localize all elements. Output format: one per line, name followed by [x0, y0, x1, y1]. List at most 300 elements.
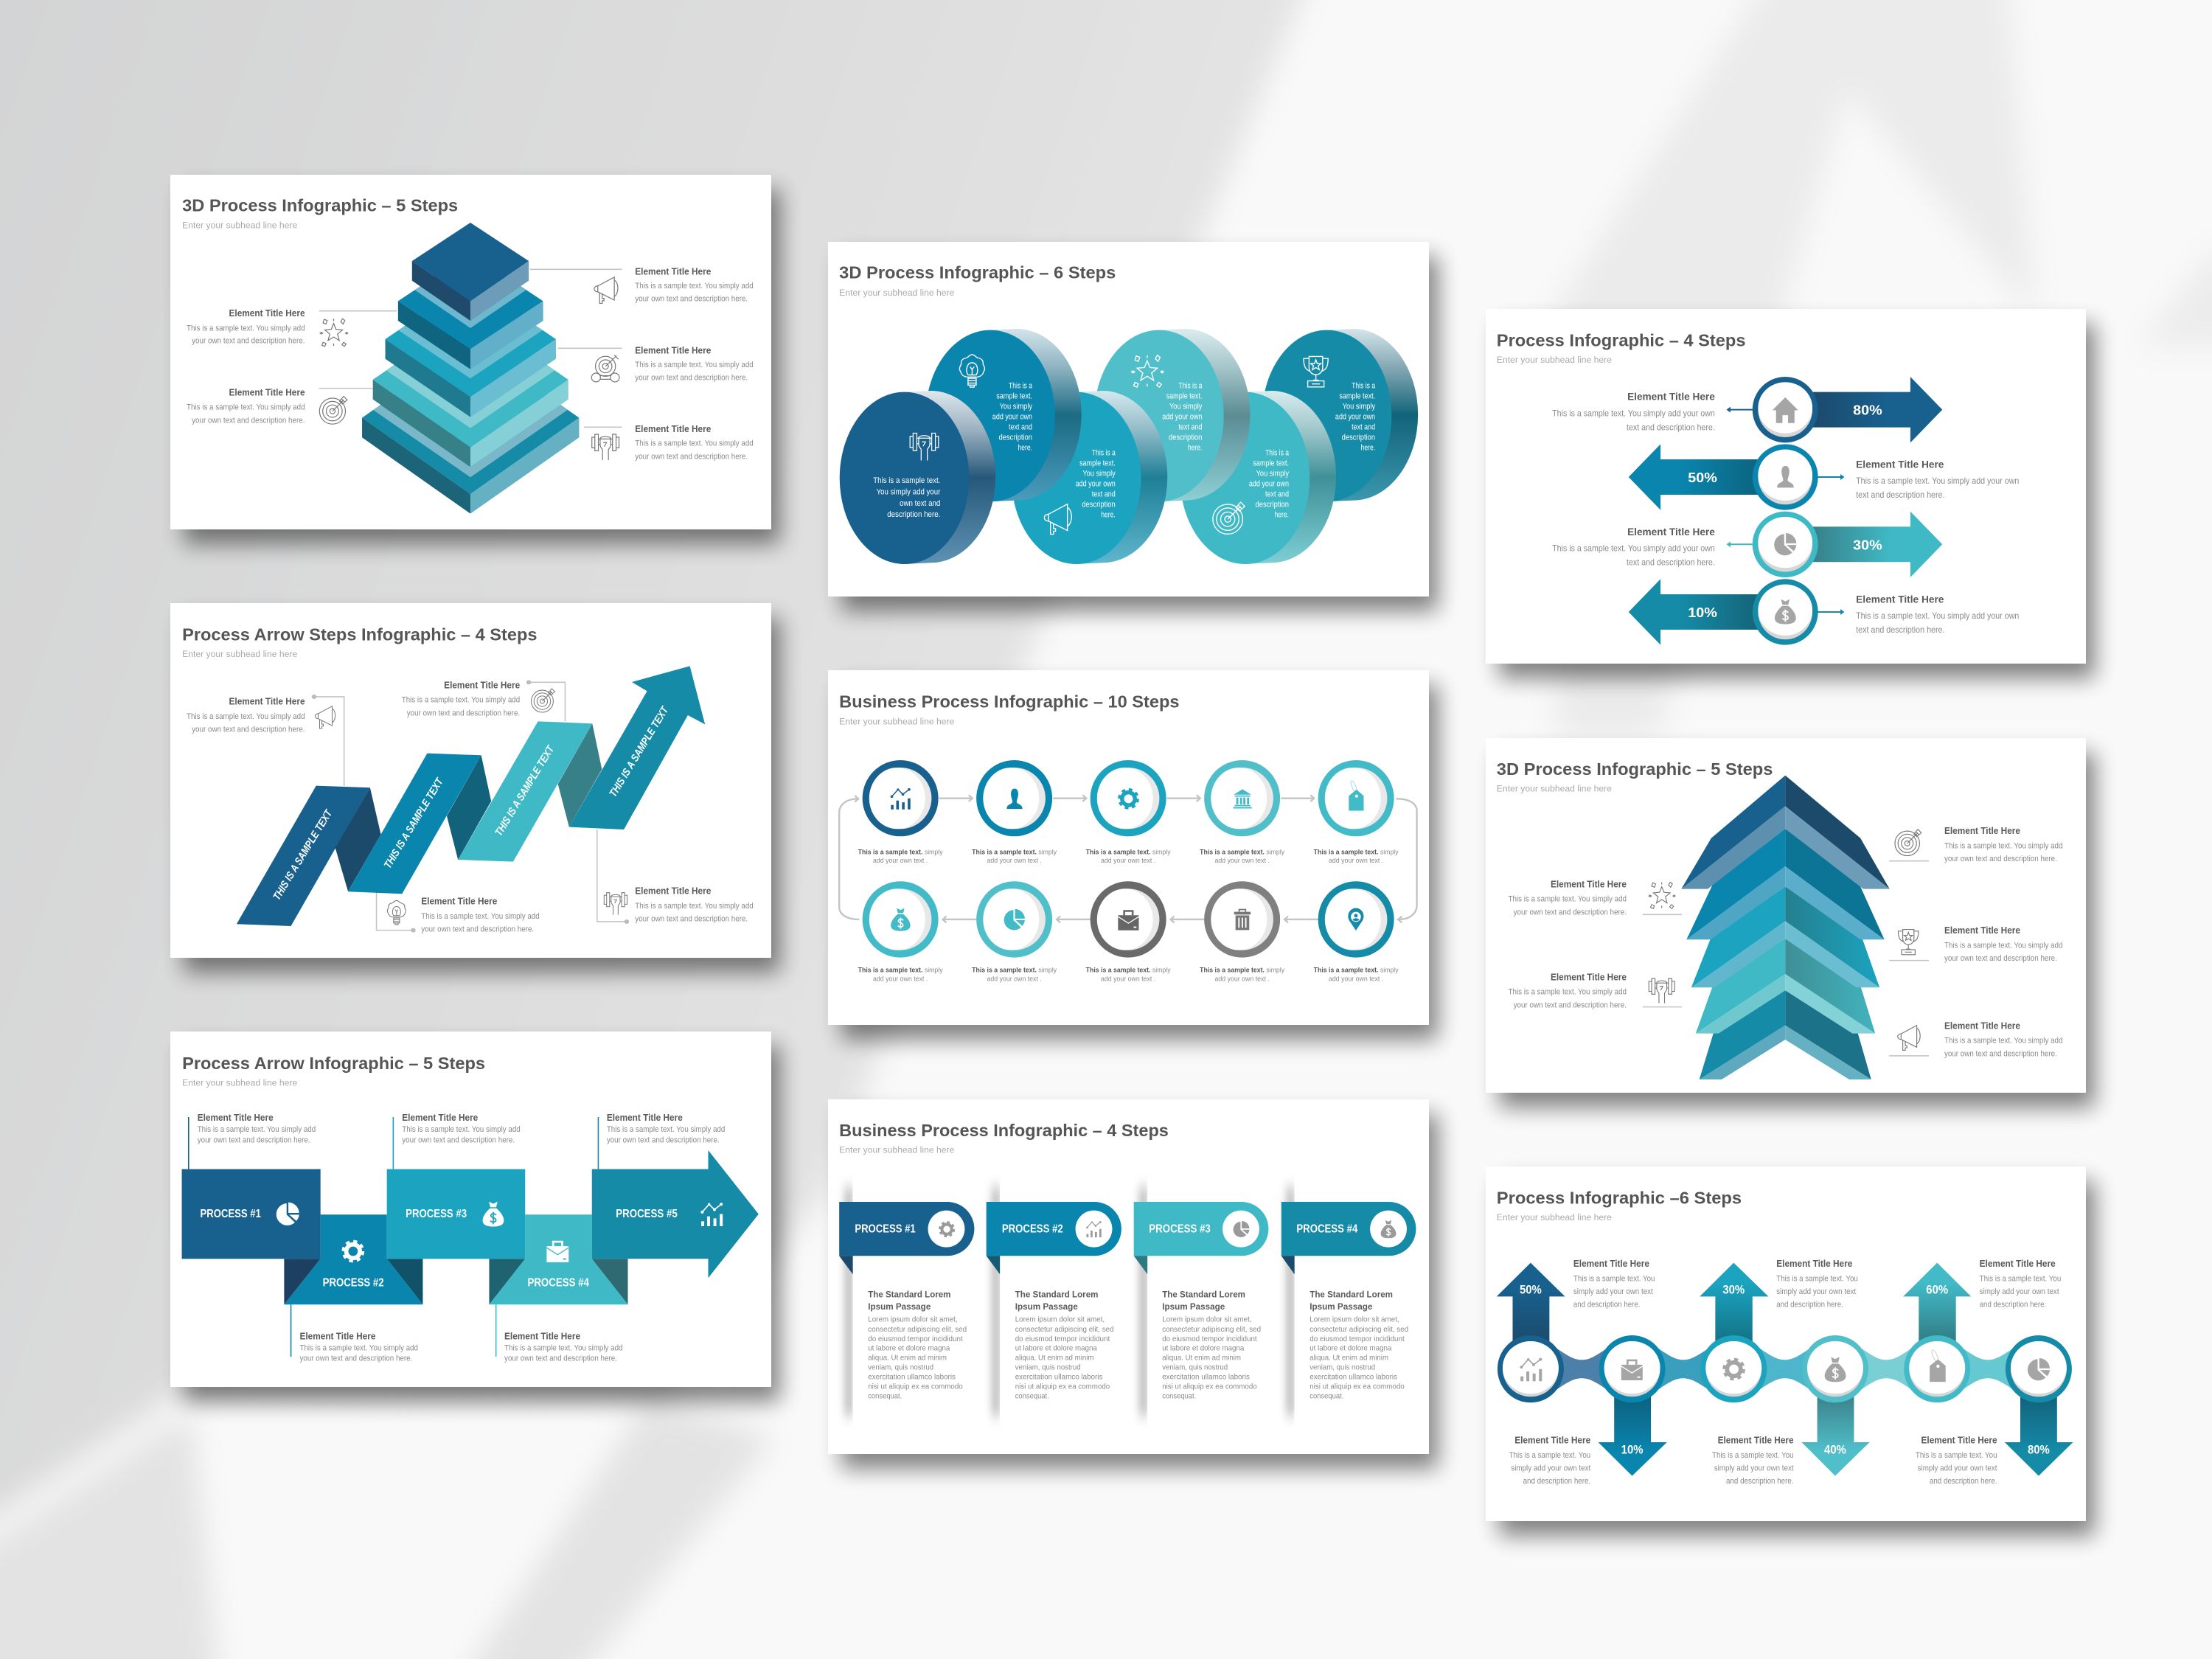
column 1: The Standard Lorem — [868, 1290, 950, 1299]
arrow down 40%: 40% — [1824, 1443, 1846, 1456]
panel: Process Infographic 6 steps — [1486, 1166, 2095, 1536]
callout 1: your own text and description here. — [198, 1135, 310, 1144]
column 2: nisi ut aliquip ex ea commodo — [1015, 1382, 1110, 1391]
callout: 80% — [1552, 392, 1715, 432]
callout top 1: This is a sample text. You — [1573, 1274, 1655, 1283]
callout 2: This is a sample text. You simply add — [299, 1343, 418, 1352]
callout lines — [189, 1117, 598, 1357]
column 2: PROCESS #2 — [1002, 1222, 1063, 1235]
callout right top — [1944, 826, 2062, 863]
column 1: nisi ut aliquip ex ea commodo — [868, 1382, 963, 1391]
callout left upper — [1509, 879, 1627, 917]
callout top 2: This is a sample text. You — [1776, 1274, 1858, 1283]
disc: front left — [840, 391, 995, 564]
arrow up 60%: 60% — [1926, 1283, 1948, 1296]
disc: front left: You simply add your — [877, 488, 940, 497]
column 4: veniam, quis nostrud — [1310, 1363, 1375, 1371]
callout lower left: Element Title Here — [229, 388, 305, 398]
callout 2: your own text and description here. — [299, 1354, 412, 1363]
column 2: do eiusmod tempor incididunt — [1015, 1335, 1110, 1343]
disc: front middle: here. — [1101, 510, 1116, 519]
callout right bottom: This is a sample text. You simply add — [1944, 1037, 2062, 1046]
icon: target — [319, 397, 347, 424]
column 1: Ipsum Passage — [868, 1302, 931, 1312]
step 8 — [1086, 881, 1171, 983]
column 2: consequat. — [1015, 1392, 1049, 1400]
callout: 30%: Element Title Here — [1627, 526, 1715, 538]
step 5: add your own text . — [1329, 857, 1383, 864]
callout: 80%: text and description here. — [1627, 423, 1715, 432]
process 3 block: PROCESS #3 — [406, 1208, 467, 1220]
callout top 2: Element Title Here — [1776, 1259, 1852, 1269]
column 4: aliqua. Ut enim ad minim — [1310, 1354, 1388, 1362]
connectors — [1554, 1347, 2015, 1391]
panel: 3D Process Infographic 5 steps pyramid — [170, 175, 780, 544]
callout 4: Element Title Here — [504, 1331, 580, 1341]
callout bottom 1: simply add your own text — [1511, 1464, 1590, 1473]
callout upper left: Element Title Here — [229, 308, 305, 319]
step 2: add your own text . — [987, 857, 1042, 864]
step 1: This is a sample text. simply — [858, 848, 943, 856]
step 4: This is a sample text. simply — [1200, 848, 1285, 856]
callout top 2: simply add your own text — [1776, 1287, 1856, 1296]
callout top 3: This is a sample text. You — [1980, 1274, 2061, 1283]
callout 3: This is a sample text. You simply add — [402, 1125, 521, 1134]
leader dots — [312, 680, 629, 933]
callout 3 — [402, 1113, 521, 1144]
callout left lower: Element Title Here — [1551, 972, 1627, 982]
column 2: consectetur adipiscing elit, sed — [1015, 1325, 1114, 1333]
callout 3: This is a sample text. You simply add — [421, 912, 540, 921]
disc: back middle: You simply — [1169, 403, 1203, 411]
step 1: 80% arrow — [1727, 377, 1942, 442]
column 3: consequat. — [1162, 1392, 1196, 1400]
callout bottom 3: and description here. — [1930, 1477, 1997, 1486]
callout 4 — [635, 886, 754, 924]
disc: back right — [1262, 329, 1418, 501]
step 7 — [1200, 881, 1285, 983]
disc: front left: own text and — [900, 499, 940, 508]
callout upper left: your own text and description here. — [192, 337, 305, 346]
icon: megaphone — [1898, 1026, 1920, 1050]
disc: back middle: This is a — [1178, 382, 1202, 391]
callout top 3: simply add your own text — [1980, 1287, 2059, 1296]
callout top 1: and description here. — [1573, 1300, 1640, 1309]
callout: 10%: text and description here. — [1856, 625, 1945, 635]
callout 5: This is a sample text. You simply add — [607, 1125, 725, 1134]
title: 3D Process Infographic – 5 Steps — [1497, 759, 1773, 779]
column 4: The Standard Lorem — [1310, 1290, 1393, 1299]
leader lines — [1643, 861, 1929, 1056]
disc: back middle: text and — [1178, 422, 1202, 431]
callout: 30% — [1552, 526, 1715, 567]
callout mid right — [635, 345, 754, 383]
subhead: Enter your subhead line here — [1497, 355, 1612, 365]
title: Business Process Infographic – 10 Steps — [839, 692, 1180, 712]
step 5 — [1314, 760, 1399, 864]
callout top 3 — [1980, 1259, 2061, 1309]
panel: 3D Process Infographic 5 steps chevrons — [1486, 738, 2095, 1107]
pyramid — [362, 223, 579, 514]
callout right top: your own text and description here. — [1944, 855, 2057, 863]
column 3: exercitation ullamco laboris — [1162, 1373, 1250, 1381]
arrow down 10%: 10% — [1621, 1443, 1643, 1456]
disc: back right: text and — [1352, 422, 1375, 431]
step 1 — [858, 760, 943, 864]
callout 2: This is a sample text. You simply add — [402, 696, 520, 705]
title: Process Arrow Infographic – 5 Steps — [182, 1054, 485, 1073]
callout right mid: This is a sample text. You simply add — [1944, 941, 2062, 950]
callout 3: your own text and description here. — [402, 1135, 515, 1144]
disc: back middle — [1094, 329, 1250, 501]
callout mid right: your own text and description here. — [635, 374, 748, 383]
arrow up 30% — [1700, 1263, 1768, 1344]
callout right top: Element Title Here — [1944, 826, 2020, 836]
callout 1: Element Title Here — [229, 697, 305, 707]
column 3: Ipsum Passage — [1162, 1302, 1225, 1312]
panel: Business Process Infographic 10 steps — [828, 670, 1438, 1040]
step 2 — [972, 760, 1057, 864]
disc: front middle — [1012, 391, 1167, 564]
callout top 1 — [1573, 1259, 1655, 1309]
step 5: This is a sample text. simply — [1314, 848, 1399, 856]
column 1: ut labore et dolore magna — [868, 1344, 950, 1352]
panel: Process Arrow Infographic 5 steps — [170, 1032, 780, 1402]
arrow up 30%: 30% — [1722, 1283, 1745, 1296]
disc: front middle: This is a — [1092, 449, 1116, 458]
ribbon labels: THIS IS A SAMPLE TEXT — [608, 704, 672, 799]
callout: 10%: Element Title Here — [1856, 594, 1944, 605]
column 2: aliqua. Ut enim ad minim — [1015, 1354, 1094, 1362]
ribbon labels: THIS IS A SAMPLE TEXT — [382, 776, 446, 871]
column 3: PROCESS #3 — [1149, 1222, 1211, 1235]
callout bottom 2: and description here. — [1726, 1477, 1794, 1486]
column 3: do eiusmod tempor incididunt — [1162, 1335, 1257, 1343]
icon: megaphone — [594, 277, 618, 303]
disc: front right: add your own — [1249, 480, 1289, 489]
column 4: consequat. — [1310, 1392, 1343, 1400]
column 1: exercitation ullamco laboris — [868, 1373, 956, 1381]
callout 3: Element Title Here — [402, 1113, 478, 1123]
process 2 block — [284, 1214, 422, 1304]
ribbon labels: THIS IS A SAMPLE TEXT — [271, 807, 335, 902]
callout mid right: This is a sample text. You simply add — [635, 361, 754, 369]
subhead: Enter your subhead line here — [182, 220, 297, 231]
callout bottom 2: This is a sample text. You — [1712, 1451, 1794, 1460]
callout 1: your own text and description here. — [192, 726, 305, 734]
column 3: Lorem ipsum dolor sit amet, — [1162, 1315, 1252, 1324]
disc: front right: You simply — [1256, 470, 1290, 479]
step 1: add your own text . — [873, 857, 928, 864]
icon: star — [1649, 883, 1675, 908]
node 6 — [2006, 1335, 2072, 1402]
disc: back left — [925, 329, 1082, 501]
step 9: This is a sample text. simply — [972, 966, 1057, 974]
callout left lower: This is a sample text. You simply add — [1509, 988, 1627, 997]
disc: back middle: here. — [1188, 443, 1202, 452]
disc: front right — [1180, 391, 1336, 564]
column 1: PROCESS #1 — [855, 1222, 916, 1235]
column 2: Lorem ipsum dolor sit amet, — [1015, 1315, 1105, 1324]
callout lower left: your own text and description here. — [192, 416, 305, 425]
step 2: 50% arrow — [1629, 444, 1844, 510]
step 3: 30% arrow — [1727, 512, 1942, 577]
callout: 80%: This is a sample text. You simply add your own — [1552, 409, 1715, 418]
arrow up 60% — [1903, 1263, 1971, 1344]
column 2: veniam, quis nostrud — [1015, 1363, 1081, 1371]
callout top 3: Element Title Here — [1980, 1259, 2056, 1269]
process 2 block: PROCESS #2 — [323, 1276, 384, 1289]
step 4: 10% arrow — [1629, 579, 1844, 645]
column 3: consectetur adipiscing elit, sed — [1162, 1325, 1261, 1333]
disc: front right: description — [1256, 500, 1289, 509]
column 2: Ipsum Passage — [1015, 1302, 1078, 1312]
process 4 block: PROCESS #4 — [527, 1276, 589, 1289]
step 4: add your own text . — [1214, 857, 1270, 864]
callout bottom 1: This is a sample text. You — [1509, 1451, 1590, 1460]
callout top right: your own text and description here. — [635, 295, 748, 304]
disc: back right: You simply — [1343, 403, 1376, 411]
step 8: add your own text . — [1101, 975, 1155, 983]
column 2 — [987, 1175, 1135, 1425]
column 3 — [1134, 1175, 1283, 1425]
step 1: 80% arrow: 80% — [1853, 403, 1882, 418]
callout 4: your own text and description here. — [635, 915, 748, 924]
callout: 80%: Element Title Here — [1627, 392, 1715, 403]
step 3: This is a sample text. simply — [1086, 848, 1171, 856]
column 3: ut labore et dolore magna — [1162, 1344, 1245, 1352]
disc: front right: sample text. — [1253, 459, 1289, 468]
column 4: Lorem ipsum dolor sit amet, — [1310, 1315, 1399, 1324]
column 3: veniam, quis nostrud — [1162, 1363, 1228, 1371]
disc: front middle: add your own — [1076, 480, 1116, 489]
callout 5 — [607, 1113, 725, 1144]
icon: dumbbell — [1649, 978, 1674, 1004]
step 10 — [858, 881, 943, 983]
column 4: exercitation ullamco laboris — [1310, 1373, 1397, 1381]
disc: back right: add your own — [1335, 413, 1375, 422]
disc: back right: description — [1342, 433, 1375, 442]
callout: 10%: This is a sample text. You simply add your own — [1856, 611, 2019, 621]
column 1: aliqua. Ut enim ad minim — [868, 1354, 947, 1362]
title: 3D Process Infographic – 6 Steps — [839, 262, 1116, 282]
callout 5: your own text and description here. — [607, 1135, 720, 1144]
callout 4: Element Title Here — [635, 886, 711, 897]
disc: back middle: sample text. — [1166, 392, 1202, 401]
icon: target — [531, 689, 554, 712]
icon: star — [320, 319, 348, 347]
disc: front middle: description — [1082, 500, 1116, 509]
callout 4: This is a sample text. You simply add — [635, 902, 754, 911]
callout right mid: Element Title Here — [1944, 925, 2020, 936]
title: Process Arrow Steps Infographic – 4 Steps — [182, 625, 537, 644]
disc: front right: text and — [1265, 490, 1289, 498]
panel: Process Infographic 4 steps — [1486, 309, 2095, 678]
flow arrows — [839, 795, 1417, 922]
leader lines — [314, 682, 627, 931]
icon: dumbbell — [592, 434, 619, 460]
panel: Process Arrow Steps Infographic 4 steps — [170, 603, 780, 973]
disc: front left: This is a sample text. — [873, 476, 940, 485]
callout top 2 — [1776, 1259, 1858, 1309]
step 6 — [1314, 881, 1399, 983]
arrow down 10% — [1599, 1394, 1667, 1476]
callout right mid — [1944, 925, 2062, 963]
disc: back right: sample text. — [1339, 392, 1375, 401]
icon: megaphone — [315, 706, 335, 728]
callout left lower: your own text and description here. — [1514, 1001, 1627, 1009]
process 4 block — [489, 1214, 628, 1304]
callout 1 — [198, 1113, 316, 1144]
disc: front right: here. — [1275, 510, 1289, 519]
step 9 — [972, 881, 1057, 983]
column 4: ut labore et dolore magna — [1310, 1344, 1392, 1352]
subhead: Enter your subhead line here — [839, 717, 954, 726]
callout: 50% — [1856, 459, 2019, 500]
chevron stack — [1681, 776, 1890, 1079]
callout bottom 1: and description here. — [1523, 1477, 1590, 1486]
callout top 2: and description here. — [1776, 1300, 1843, 1309]
callout bottom 1 — [1509, 1436, 1590, 1486]
callout low right: Element Title Here — [635, 424, 711, 434]
node 3 — [1700, 1335, 1767, 1402]
arrow up 50%: 50% — [1520, 1283, 1542, 1296]
callout right top: This is a sample text. You simply add — [1944, 841, 2062, 850]
step 8: This is a sample text. simply — [1086, 966, 1171, 974]
disc: front right: This is a — [1265, 449, 1289, 458]
column 2: The Standard Lorem — [1015, 1290, 1098, 1299]
callout right bottom: Element Title Here — [1944, 1020, 2020, 1031]
node 1 — [1498, 1335, 1564, 1402]
step 4 — [1200, 760, 1285, 864]
callout top 1: Element Title Here — [1573, 1259, 1649, 1269]
column 4 — [1281, 1175, 1427, 1425]
column 1 — [839, 1175, 989, 1425]
process 3 block — [387, 1169, 525, 1259]
title: Process Infographic –6 Steps — [1497, 1188, 1742, 1208]
zigzag arrow — [237, 666, 705, 926]
callout 2 — [402, 680, 520, 717]
step 2: This is a sample text. simply — [972, 848, 1057, 856]
process 1 block: PROCESS #1 — [200, 1208, 261, 1220]
callout 1: This is a sample text. You simply add — [187, 712, 305, 721]
column 1: veniam, quis nostrud — [868, 1363, 933, 1371]
disc: front middle: text and — [1092, 490, 1116, 498]
column 1: consequat. — [868, 1392, 902, 1400]
ribbon labels: THIS IS A SAMPLE TEXT — [493, 743, 557, 838]
callout: 10% — [1856, 594, 2019, 635]
column 2: ut labore et dolore magna — [1015, 1344, 1097, 1352]
callout low right — [635, 424, 754, 461]
node 4 — [1802, 1335, 1868, 1402]
column 2: exercitation ullamco laboris — [1015, 1373, 1103, 1381]
callout: 50%: This is a sample text. You simply add your own — [1856, 476, 2019, 486]
callout right mid: your own text and description here. — [1944, 954, 2057, 963]
process 5 arrow — [592, 1150, 759, 1278]
subhead: Enter your subhead line here — [839, 288, 954, 298]
disc: front middle: sample text. — [1079, 459, 1116, 468]
column 3: The Standard Lorem — [1162, 1290, 1245, 1299]
callout: 50%: Element Title Here — [1856, 459, 1944, 470]
title: Process Infographic – 4 Steps — [1497, 330, 1746, 350]
callout right bottom — [1944, 1020, 2062, 1058]
arrow down 80%: 80% — [2028, 1443, 2050, 1456]
column 1: do eiusmod tempor incididunt — [868, 1335, 963, 1343]
callout lower left — [187, 388, 305, 425]
callout top 1: simply add your own text — [1573, 1287, 1653, 1296]
callout 3: Element Title Here — [421, 897, 497, 907]
callout bottom 2: simply add your own text — [1714, 1464, 1794, 1473]
icon: bulb — [387, 900, 406, 925]
step 10: add your own text . — [873, 975, 928, 983]
icon: dumbbell — [604, 893, 627, 915]
node 2 — [1599, 1335, 1666, 1402]
step 3 — [1086, 760, 1171, 864]
callout 4: your own text and description here. — [504, 1354, 617, 1363]
callout 1 — [187, 697, 305, 734]
callout bottom 2: Element Title Here — [1718, 1436, 1794, 1446]
callout low right: This is a sample text. You simply add — [635, 439, 754, 448]
disc: back left: text and — [1009, 422, 1032, 431]
callout left upper: your own text and description here. — [1514, 908, 1627, 917]
disc: back left: You simply — [1000, 403, 1033, 411]
subhead: Enter your subhead line here — [182, 650, 297, 659]
callout 4 — [504, 1331, 622, 1363]
arrow up 50% — [1497, 1263, 1565, 1344]
callout upper left: This is a sample text. You simply add — [187, 324, 305, 333]
subhead: Enter your subhead line here — [1497, 1213, 1612, 1222]
disc: back left: sample text. — [996, 392, 1032, 401]
icon: trophy — [1899, 930, 1919, 955]
arrow down 40% — [1801, 1394, 1870, 1476]
callout left upper: Element Title Here — [1551, 879, 1627, 889]
subhead: Enter your subhead line here — [182, 1078, 297, 1088]
title: Business Process Infographic – 4 Steps — [839, 1121, 1169, 1140]
process 5 arrow: PROCESS #5 — [616, 1208, 678, 1220]
callout top 3: and description here. — [1980, 1300, 2046, 1309]
disc: back left: add your own — [992, 413, 1032, 422]
callout top right: Element Title Here — [635, 266, 711, 276]
step 10: This is a sample text. simply — [858, 966, 943, 974]
callout 1: Element Title Here — [198, 1113, 274, 1123]
callout 2: your own text and description here. — [407, 709, 520, 717]
subhead: Enter your subhead line here — [1497, 784, 1612, 794]
icon: dart — [591, 355, 619, 382]
callout left lower — [1509, 972, 1627, 1009]
disc: front left: description here. — [887, 510, 940, 519]
step 3: add your own text . — [1101, 857, 1155, 864]
callout 3: your own text and description here. — [421, 925, 534, 934]
disc: back left: here. — [1018, 443, 1032, 452]
subhead: Enter your subhead line here — [839, 1145, 954, 1155]
disc: back middle: add your own — [1162, 413, 1202, 422]
disc: back right: This is a — [1352, 382, 1375, 391]
callout: 30%: text and description here. — [1627, 558, 1715, 567]
callout right bottom: your own text and description here. — [1944, 1049, 2057, 1058]
callout top right: This is a sample text. You simply add — [635, 282, 754, 291]
column 1: consectetur adipiscing elit, sed — [868, 1325, 967, 1333]
callout bottom 3: simply add your own text — [1918, 1464, 1997, 1473]
callout 3 — [421, 897, 540, 934]
process 1 block — [182, 1169, 321, 1259]
callout 2: Element Title Here — [444, 680, 520, 690]
step 6: add your own text . — [1329, 975, 1383, 983]
callout 5: Element Title Here — [607, 1113, 683, 1123]
disc: back left: This is a — [1009, 382, 1032, 391]
callout: 30%: This is a sample text. You simply add your own — [1552, 544, 1715, 553]
disc: front middle: You simply — [1082, 470, 1116, 479]
callout bottom 2 — [1712, 1436, 1794, 1486]
